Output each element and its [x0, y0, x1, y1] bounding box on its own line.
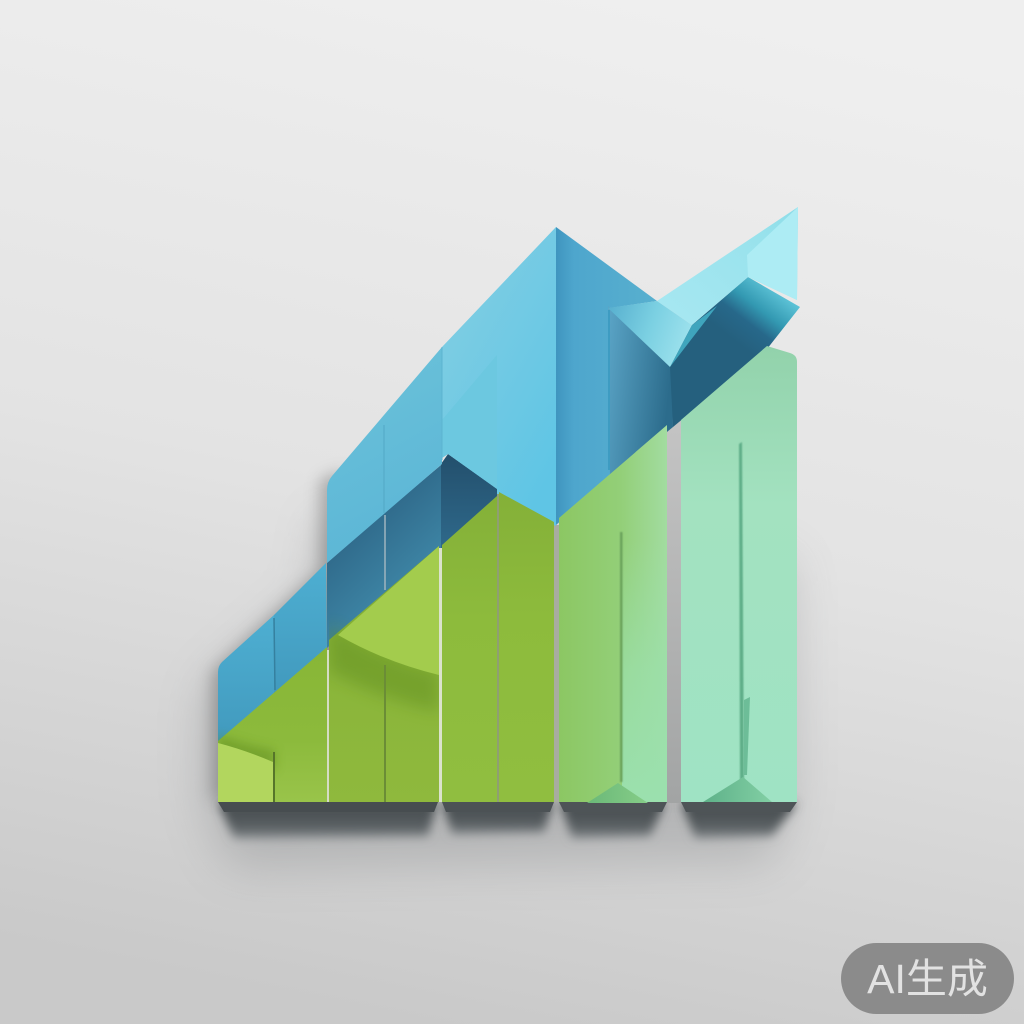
bar 5 and 6 green [442, 492, 554, 802]
bar 3 and 4 green [329, 546, 439, 802]
bar 8 mint [681, 346, 797, 802]
blue ribbon: dark underside [327, 454, 499, 648]
drop shadows [205, 418, 797, 865]
bar 7 green to mint [559, 425, 667, 803]
blue ribbon: upper light panel [327, 227, 556, 563]
bar 1 and 2 green [218, 647, 327, 802]
blue ribbon: center mid-blue panel [556, 227, 673, 525]
blue ribbon: left steps [218, 563, 327, 745]
bar separators [326, 548, 442, 802]
badge: AI生成: AI生成 [867, 956, 988, 1002]
badge: AI生成 [841, 943, 1014, 1014]
arrow head: dark and teal fold [670, 277, 800, 427]
arrow head: light fold planes [608, 207, 798, 367]
